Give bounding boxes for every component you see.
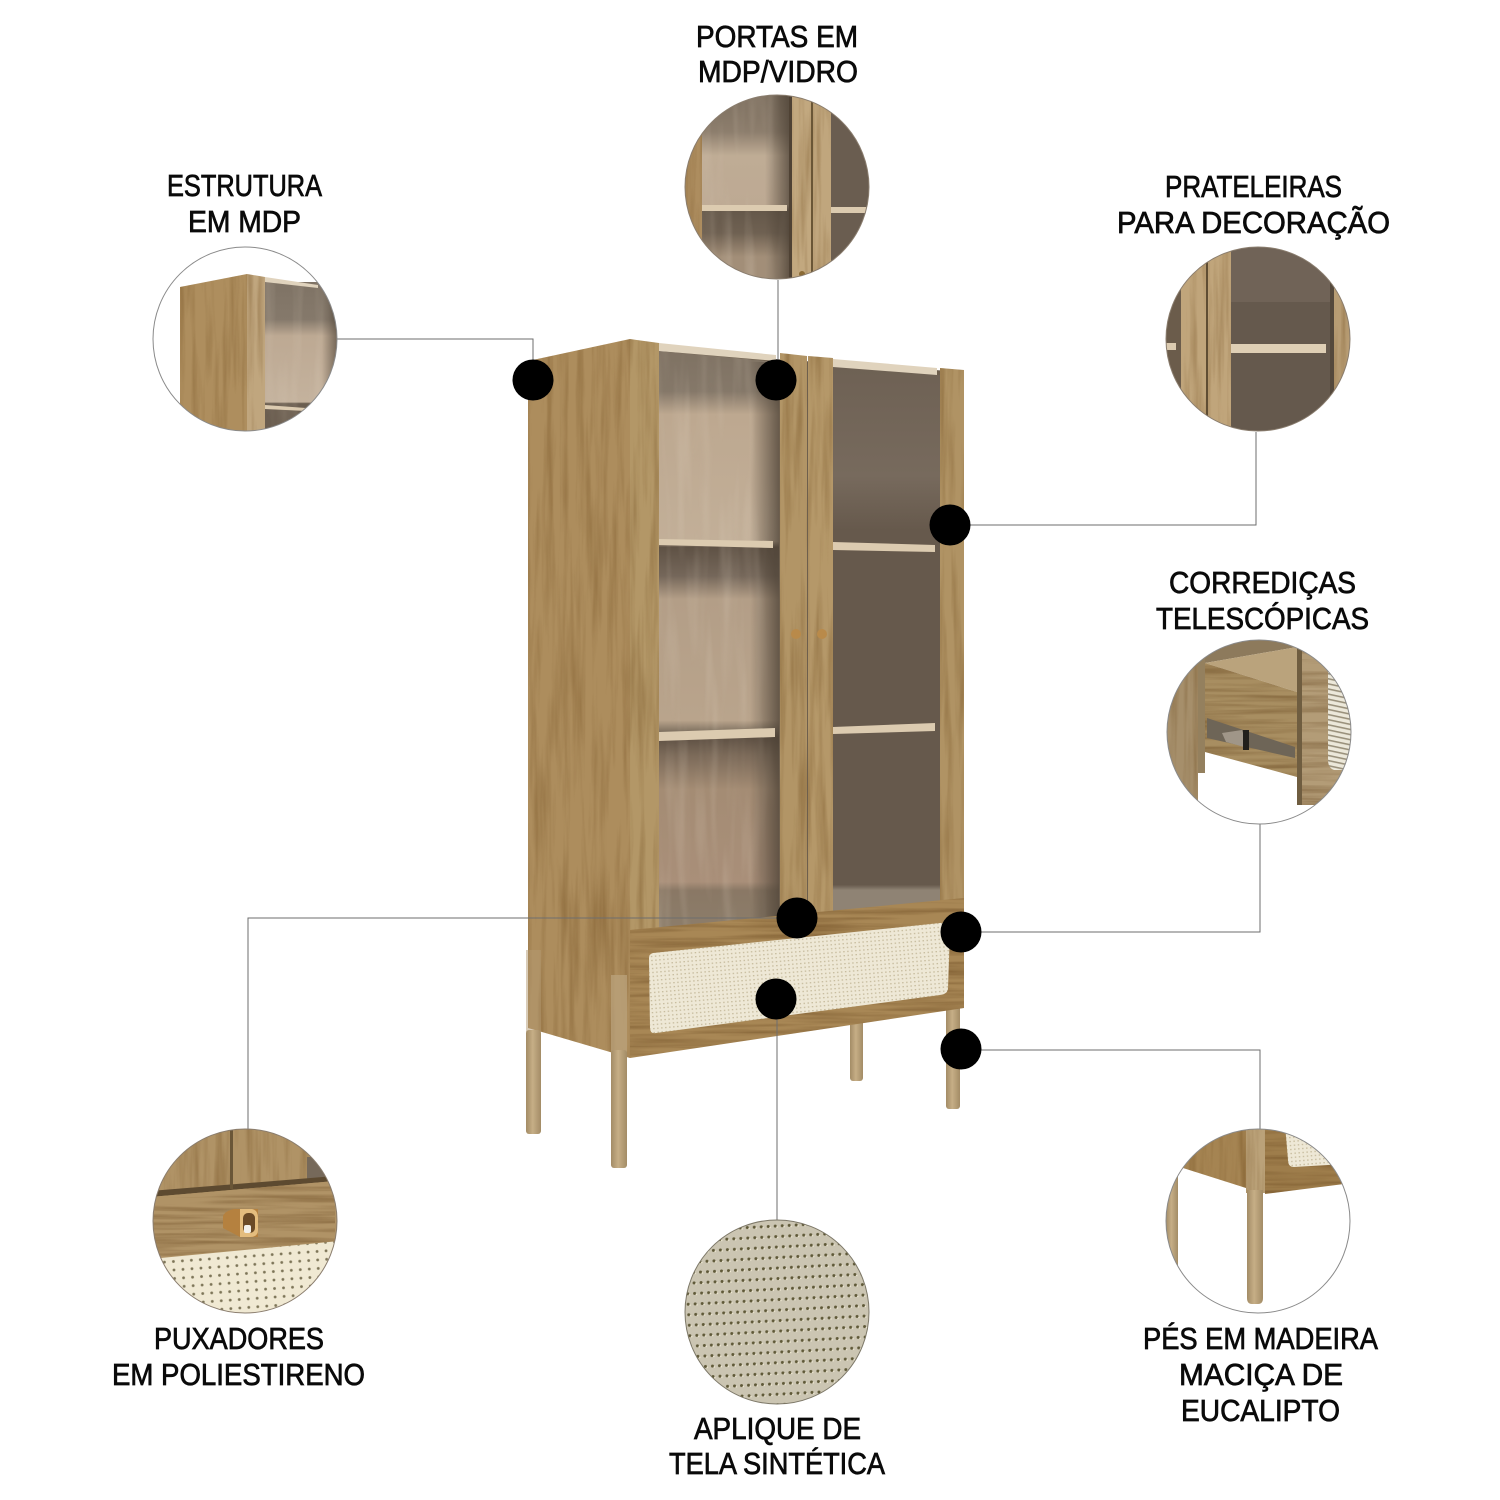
label: prateleiras para decoração <box>1117 169 1390 240</box>
label: estrutura em mdp <box>167 168 322 239</box>
front stile <box>630 339 659 931</box>
front right leg <box>946 1005 960 1109</box>
right shelf 2 <box>833 723 935 734</box>
left shelf 1 <box>659 539 773 548</box>
label: portas em mdp/vidro: MDP/VIDRO <box>698 54 858 89</box>
label: corrediças telescópicas <box>1156 565 1369 636</box>
label: estrutura em mdp: EM MDP <box>188 204 301 239</box>
label: puxadores em poliestireno: EM POLIESTIRENO <box>112 1357 365 1392</box>
label: pés em madeira maciça de eucalipto: EUCALIPTO <box>1181 1393 1340 1428</box>
label: aplique de tela sintética: TELA SINTÉTICA <box>669 1446 885 1481</box>
left back leg <box>526 950 541 1134</box>
label: pés em madeira maciça de eucalipto <box>1143 1321 1378 1428</box>
detail circle: tela sintética <box>685 1220 869 1404</box>
handle <box>223 1209 258 1237</box>
door knobs <box>791 629 827 639</box>
label: aplique de tela sintética: APLIQUE DE <box>694 1411 861 1446</box>
left shelf 2 <box>659 728 775 741</box>
label: pés em madeira maciça de eucalipto: PÉS EM MADEIRA <box>1143 1321 1378 1356</box>
label: estrutura em mdp: ESTRUTURA <box>167 168 322 203</box>
label: aplique de tela sintética <box>669 1411 885 1481</box>
callout dots <box>512 360 982 1070</box>
label: puxadores em poliestireno: PUXADORES <box>154 1321 324 1356</box>
detail circle: pés <box>1166 1125 1352 1313</box>
cabinet side panel <box>528 339 630 1058</box>
detail circle: prateleiras <box>1166 247 1352 431</box>
label: prateleiras para decoração: PRATELEIRAS <box>1165 169 1342 204</box>
drawer front <box>630 898 964 1058</box>
detail circle: estrutura <box>150 245 340 435</box>
label: corrediças telescópicas: CORREDIÇAS <box>1169 565 1356 600</box>
right outer stile <box>940 368 964 902</box>
label: pés em madeira maciça de eucalipto: MACIÇA DE <box>1179 1357 1343 1392</box>
drawer cane panel <box>649 923 950 1033</box>
cabinet illustration <box>526 339 964 1168</box>
left front leg <box>611 975 627 1168</box>
label: prateleiras para decoração: PARA DECORAÇÃO <box>1117 205 1390 240</box>
detail circle: portas <box>685 95 870 279</box>
connector lines <box>248 280 1260 1221</box>
right door stile <box>808 356 833 915</box>
label: puxadores em poliestireno <box>112 1321 365 1392</box>
right compartment glass <box>833 359 940 912</box>
label: portas em mdp/vidro: PORTAS EM <box>696 19 858 54</box>
top cream strip right <box>833 359 937 375</box>
right shelf 1 <box>833 542 935 552</box>
left door stile <box>780 353 807 918</box>
detail circle: corrediças <box>1167 640 1352 824</box>
cabinet dark backing <box>659 351 964 928</box>
top cream strip left <box>659 343 776 361</box>
left compartment interior <box>659 343 779 928</box>
detail circle: puxadores <box>150 1129 340 1320</box>
label: portas em mdp/vidro <box>696 19 858 89</box>
label: corrediças telescópicas: TELESCÓPICAS <box>1156 601 1369 636</box>
rear right leg <box>850 1020 863 1081</box>
